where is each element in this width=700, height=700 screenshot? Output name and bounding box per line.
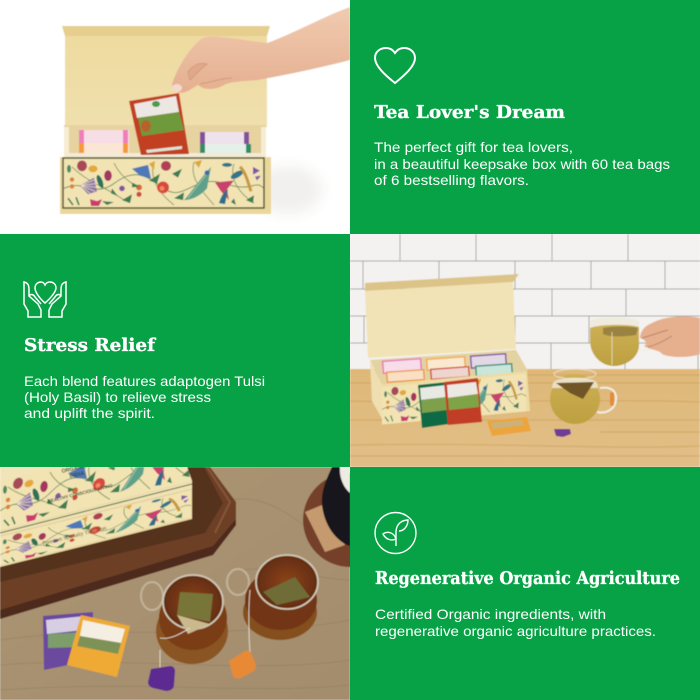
wooden tray [0,467,236,619]
panel: kitchen photo with mugs [350,234,700,467]
panel: overhead photo with tray and mugs [0,467,350,700]
orange tag [229,651,256,678]
open gift box [365,274,530,424]
purple tag [148,666,175,691]
icon: heart [375,48,415,83]
hand holding mug [640,316,700,357]
mug left with tea bag [141,575,228,664]
panel: Tea Lover's Dream [350,0,700,234]
orange tea packet [487,417,531,436]
floral box front [60,157,271,214]
floral gift box [0,467,193,568]
black jar [322,467,350,546]
box text [42,463,114,547]
panel: Stress Relief [0,234,350,467]
icon: hands holding heart [24,282,66,317]
panel: Regenerative Organic Agriculture [350,467,700,700]
body text: The perfect gift for tea lovers, [374,140,573,155]
body text [24,374,265,421]
body text: and uplift the spirit. [24,406,155,421]
box text: HEALTHY CONSCIOUS LIVING [47,483,114,504]
box text: ORGANIC [61,463,88,475]
mug right with tea bag [227,555,318,640]
box text: INDIA [69,471,85,480]
round wooden board [302,472,350,568]
tea bag packets [43,612,130,677]
box interior with tea bags [64,125,266,158]
panel: box photo with hand [60,6,350,215]
heading: Stress Relief [24,335,156,356]
body text: Certified Organic ingredients, with [375,607,606,622]
tea bag: Tulsi Masala Chai [129,93,189,155]
hand holding tea bag [172,7,350,93]
tea bag strings [160,590,250,668]
tea bags in front of box [418,378,482,428]
box lid [62,26,270,127]
lifted glass mug [589,318,640,366]
body text: Each blend features adaptogen Tulsi [24,374,265,389]
body text: regenerative organic agriculture practices. [375,624,656,639]
purple tag [554,429,571,437]
heading: Tea Lover's Dream [374,102,565,123]
glass mug on table [550,369,616,424]
body text: (Holy Basil) to relieve stress [24,390,211,405]
body text: of 6 bestselling flavors. [374,173,529,188]
body text [374,140,670,188]
body text: in a beautiful keepsake box with 60 tea bags [374,157,670,172]
body text [375,607,656,639]
box text: Premium Specialty Tulsi Teas [42,525,107,547]
icon: seedling in circle [375,512,416,554]
